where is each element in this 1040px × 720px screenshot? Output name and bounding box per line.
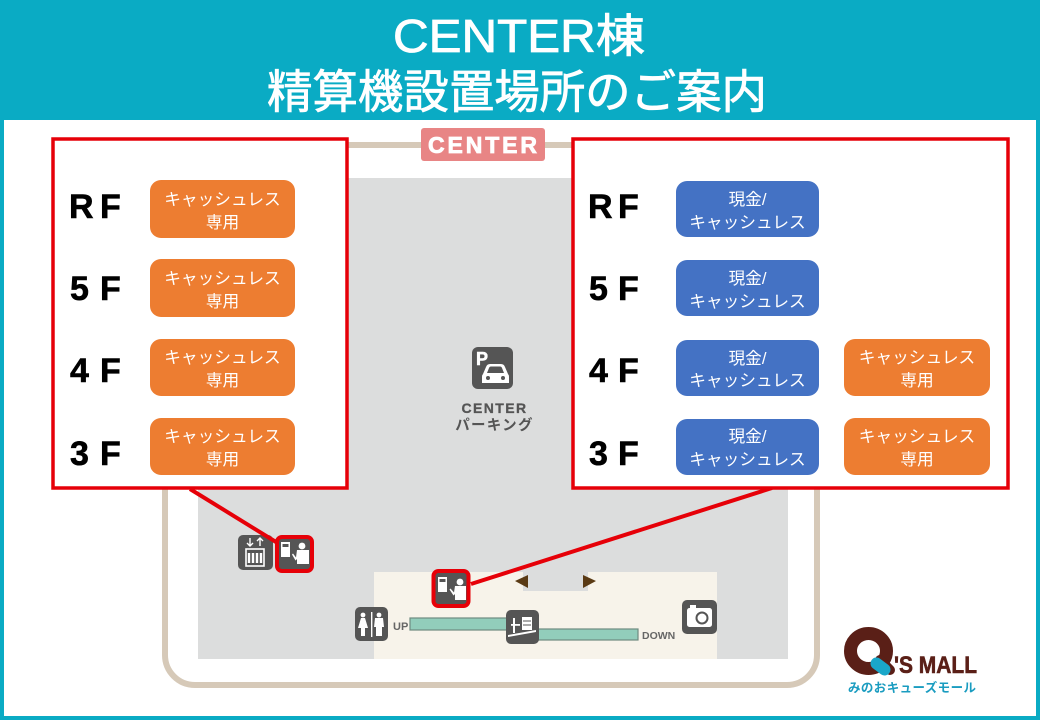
title: CENTER棟	[393, 10, 645, 62]
floor labels: F	[618, 270, 639, 308]
connector: left panel to payment icon	[190, 489, 276, 542]
floor labels: 4	[70, 352, 89, 390]
floor map	[165, 145, 817, 685]
parking icon and label: パーキング	[455, 416, 534, 434]
floor labels: 3	[70, 435, 89, 473]
icon: stroller rental	[506, 610, 539, 644]
logo: Q's MALL	[848, 634, 977, 695]
connector: right panel to payment icon	[471, 488, 772, 584]
badges: cash and cashless: 現金/	[728, 269, 767, 288]
badges: cashless only: 専用	[206, 292, 239, 311]
badges: cash and cashless: キャッシュレス	[689, 450, 806, 469]
floor labels: 3	[589, 435, 608, 473]
parking icon and label: CENTER	[462, 400, 527, 416]
badges: cashless only	[844, 339, 990, 475]
icon: payment machine left	[277, 537, 312, 571]
badges: cashless only: キャッシュレス	[164, 190, 281, 209]
badges: cashless only: キャッシュレス	[164, 427, 281, 446]
floor labels: F	[100, 270, 121, 308]
direction arrow right	[583, 575, 596, 588]
icon: camera	[682, 600, 717, 634]
badges: cash and cashless: キャッシュレス	[689, 213, 806, 232]
upper escalator bar	[410, 618, 510, 630]
floor labels: F	[618, 435, 639, 473]
badges: cash and cashless	[676, 181, 819, 475]
floor labels: F	[100, 188, 121, 226]
floor labels: 5	[70, 270, 89, 308]
badges: cashless only: 専用	[900, 371, 934, 390]
badges: cashless only: 専用	[900, 450, 934, 469]
parking icon and label: P	[476, 349, 488, 369]
floor labels: F	[100, 435, 121, 473]
floor labels: R	[588, 188, 613, 226]
badges: cashless only: キャッシュレス	[164, 348, 281, 367]
floor labels: F	[618, 188, 639, 226]
badges: cash and cashless: キャッシュレス	[689, 292, 806, 311]
label: UP: UP	[393, 621, 408, 633]
title: 精算機設置場所のご案内	[267, 66, 767, 118]
floor labels: 4	[589, 352, 608, 390]
badges: cash and cashless: 現金/	[728, 190, 767, 209]
badges: cashless only: キャッシュレス	[859, 427, 975, 446]
mall floor area	[374, 572, 717, 659]
badges: cash and cashless: 現金/	[728, 349, 767, 368]
floor labels	[588, 188, 639, 473]
floor labels	[69, 188, 121, 473]
floor labels: F	[100, 352, 121, 390]
icon: payment machine centre	[434, 571, 468, 606]
badges: cash and cashless: キャッシュレス	[689, 371, 806, 390]
building outline	[165, 145, 817, 685]
badges: cashless only: 専用	[206, 450, 239, 469]
floor labels: R	[69, 188, 94, 226]
parking icon and label	[455, 347, 534, 434]
badges: cashless only	[150, 180, 295, 475]
badges: cash and cashless: 現金/	[728, 427, 767, 446]
badges: cashless only: キャッシュレス	[859, 348, 975, 367]
direction arrow left	[515, 575, 528, 588]
logo: Q's MALL: 'S MALL	[894, 652, 977, 679]
badges: cashless only: 専用	[206, 213, 239, 232]
floor labels: 5	[589, 270, 608, 308]
parking area	[198, 178, 788, 659]
floor labels: F	[618, 352, 639, 390]
building sign	[421, 128, 545, 161]
badges: cashless only: キャッシュレス	[164, 269, 281, 288]
icon: elevator	[238, 535, 273, 570]
label: DOWN: DOWN	[642, 630, 675, 642]
badges: cashless only: 専用	[206, 371, 239, 390]
icon: restroom	[355, 607, 388, 641]
title	[267, 10, 767, 118]
panel: right floors	[573, 139, 1008, 488]
logo: Q's MALL: みのおキューズモール	[848, 680, 976, 695]
building sign: CENTER	[428, 132, 537, 158]
panel: left floors	[53, 139, 347, 488]
lower escalator bar	[535, 629, 638, 640]
